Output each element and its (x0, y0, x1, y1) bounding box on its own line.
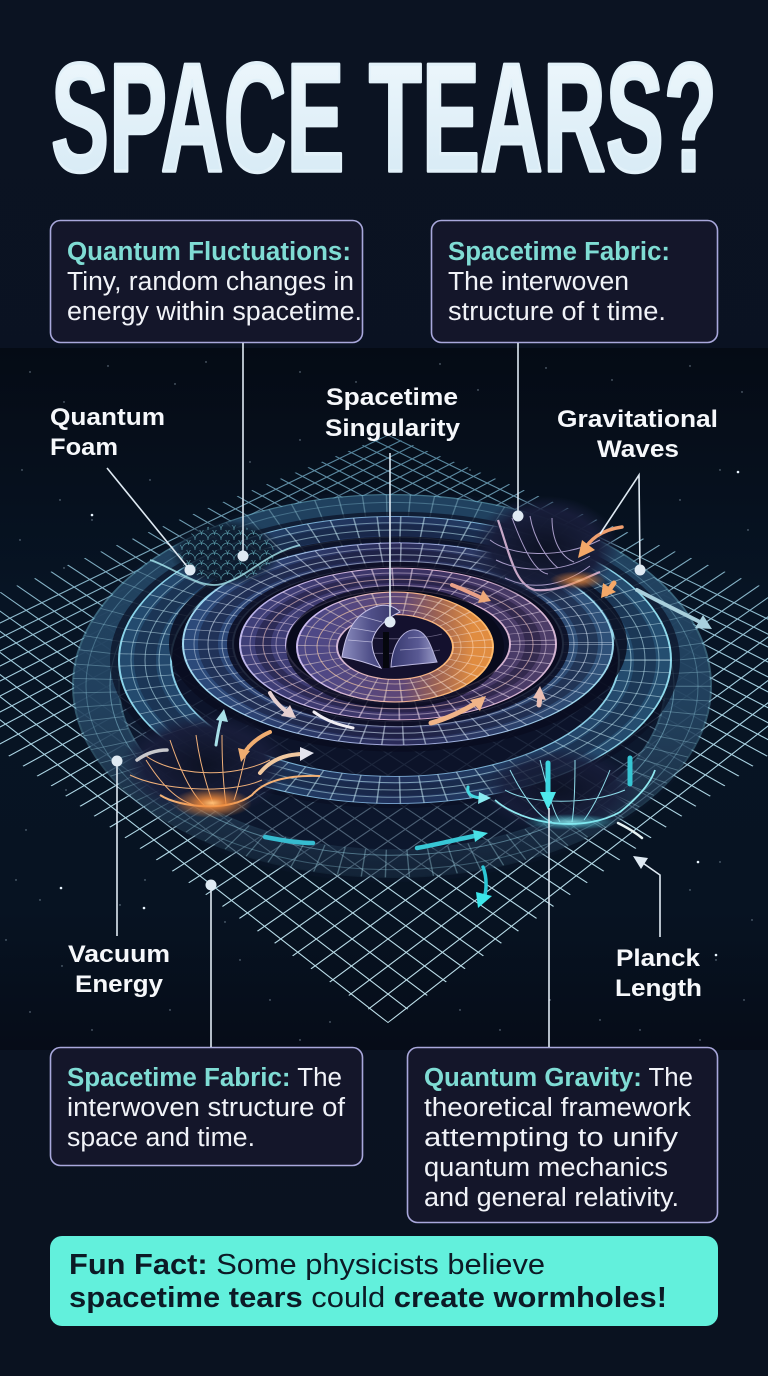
arrow: cyan flat (265, 837, 313, 843)
arrow: cyan up (216, 709, 228, 745)
callout: Quantum Fluctuations box (50, 220, 362, 342)
callout: Quantum Gravity box: and general relativity. (424, 1184, 679, 1212)
leader: Spacetime Singularity (384, 453, 396, 628)
leader arrow: Planck Length (633, 856, 660, 937)
gravity well: lower left orange (121, 713, 320, 818)
callout: Spacetime Fabric box, top: structure of t time. (448, 298, 666, 326)
callout: Quantum Gravity box (408, 1048, 718, 1222)
arrow: orange curve (238, 732, 270, 762)
ring d (115, 514, 675, 806)
callout: Quantum Fluctuations box: Tiny, random changes in (67, 268, 354, 296)
label: Planck Length: Planck (616, 945, 700, 972)
fun fact banner: Fun Fact: Some physicists believe (69, 1249, 545, 1281)
arrow: cyan hook (468, 787, 491, 804)
label: Quantum Foam: Quantum (50, 404, 165, 431)
arrow: pale orange right (260, 747, 314, 773)
arrow: pale outgoing (637, 590, 712, 629)
callout: Quantum Fluctuations box: energy within spacetime. (67, 298, 362, 326)
arrow: orange on ring (431, 696, 486, 723)
callout: Quantum Gravity box: attempting to unify (424, 1124, 678, 1152)
arrow: small orange (601, 583, 616, 598)
callout: Quantum Gravity box: theoretical framework (424, 1094, 691, 1122)
singularity hook (342, 605, 442, 668)
label: Spacetime Singularity: Singularity (325, 415, 460, 442)
callout: Quantum Fluctuations box: Quantum Fluctuations: (67, 238, 351, 266)
arrow: white sliver (314, 712, 353, 728)
label: Gravitational Waves: Waves (597, 436, 679, 463)
callout: Spacetime Fabric box, top: Spacetime Fabric: (448, 238, 670, 266)
callout: Quantum Gravity box: quantum mechanics (424, 1154, 668, 1182)
quantum foam patch (150, 519, 300, 587)
callout: Spacetime Fabric box, bottom: space and time. (67, 1124, 255, 1152)
arrow: orange, upper right well (578, 527, 622, 558)
label: Gravitational Waves: Gravitational (557, 406, 718, 433)
perspective spacetime grid (0, 436, 768, 1023)
fun fact banner: spacetime tears could create wormholes! (69, 1282, 667, 1314)
ring e: outer faint wave (86, 502, 698, 870)
fun fact banner (50, 1236, 718, 1326)
leader: top Spacetime Fabric (512, 343, 524, 522)
ring b (233, 565, 563, 723)
label: Spacetime Singularity (325, 384, 460, 442)
space panel: starfield backdrop (0, 348, 768, 1050)
arrow: pink up (533, 686, 546, 705)
leader: bottom Spacetime Fabric (206, 880, 216, 1047)
leader: Vacuum Energy (112, 756, 122, 936)
ring c (175, 539, 621, 749)
leader: Quantum Foam (107, 468, 196, 576)
gravity well: lower right cyan (482, 748, 655, 832)
label: Gravitational Waves (557, 406, 718, 463)
leader: Quantum Gravity (548, 808, 550, 1047)
arrow: cyan sliver (628, 758, 632, 784)
label: Vacuum Energy: Vacuum (68, 941, 170, 968)
arrow: cyan down (540, 763, 556, 810)
label: Vacuum Energy (68, 941, 170, 998)
label: Spacetime Singularity: Spacetime (326, 384, 458, 411)
callout: Quantum Gravity box: Quantum Gravity: The (424, 1064, 693, 1092)
callout: Spacetime Fabric box, bottom (50, 1048, 362, 1166)
arrow: white sliver right (618, 823, 642, 838)
label: Planck Length: Length (615, 975, 702, 1002)
arrow: cyan long (417, 830, 488, 848)
ring a: orange core coil (291, 589, 499, 705)
spiral warp of spacetime (70, 490, 714, 882)
callout: Spacetime Fabric box, top (432, 220, 718, 342)
callout: Spacetime Fabric box, bottom: interwoven structure of (67, 1094, 346, 1122)
arrow: pink on coil (452, 585, 491, 603)
callout: Spacetime Fabric box, top: The interwoven (448, 268, 629, 296)
leader: Gravitational Waves (600, 475, 646, 576)
leader: Quantum Fluctuations (238, 343, 248, 562)
dark warp bed (70, 490, 714, 882)
wave direction arrows (137, 527, 712, 908)
arrow: pale left (270, 693, 296, 718)
gravity well: upper right (471, 496, 619, 600)
arrow: cyan down curve (476, 867, 492, 908)
label: Quantum Foam (50, 404, 165, 461)
label: Vacuum Energy: Energy (75, 971, 163, 998)
label: Planck Length (615, 945, 702, 1002)
arrow: pale left sliver (137, 750, 167, 760)
callout: Spacetime Fabric box, bottom: Spacetime Fabric: The (67, 1064, 342, 1092)
label: Quantum Foam: Foam (50, 434, 118, 461)
